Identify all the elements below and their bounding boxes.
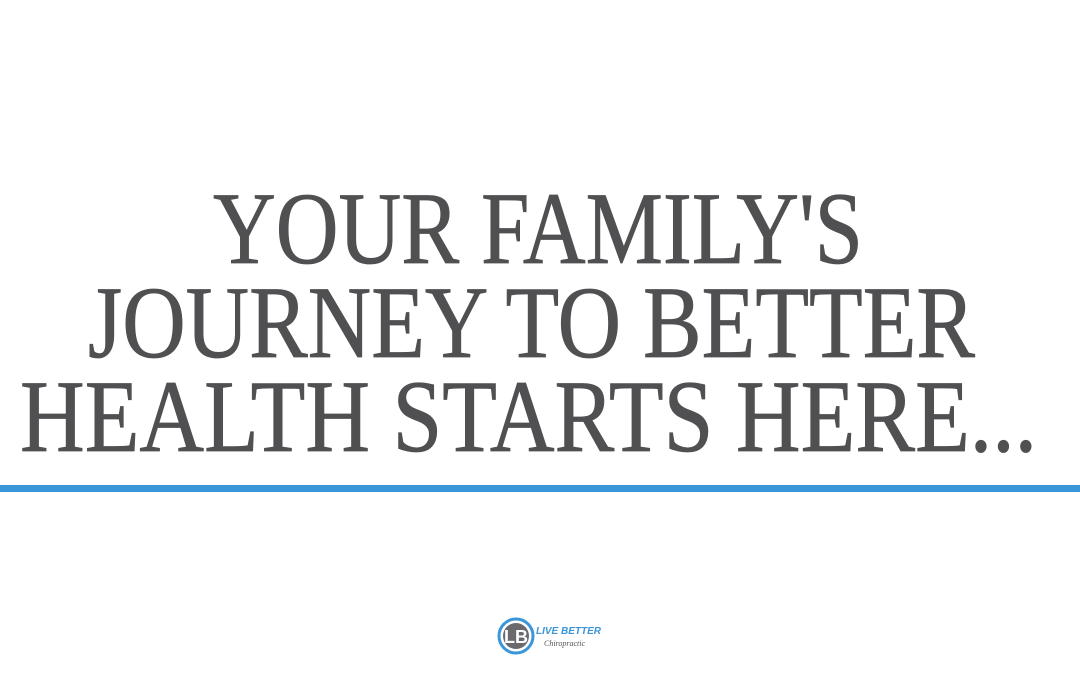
- icon: LB circle: LB: [504, 627, 528, 647]
- logo: Live Better Chiropractic: Chiropractic: [544, 639, 585, 648]
- logo text: LIVE BETTER: [536, 626, 602, 637]
- title: [20, 172, 1037, 474]
- title: YOUR FAMILY'S: [213, 172, 863, 286]
- logo: Live Better Chiropractic: [499, 619, 602, 653]
- blue divider line: [0, 485, 1080, 492]
